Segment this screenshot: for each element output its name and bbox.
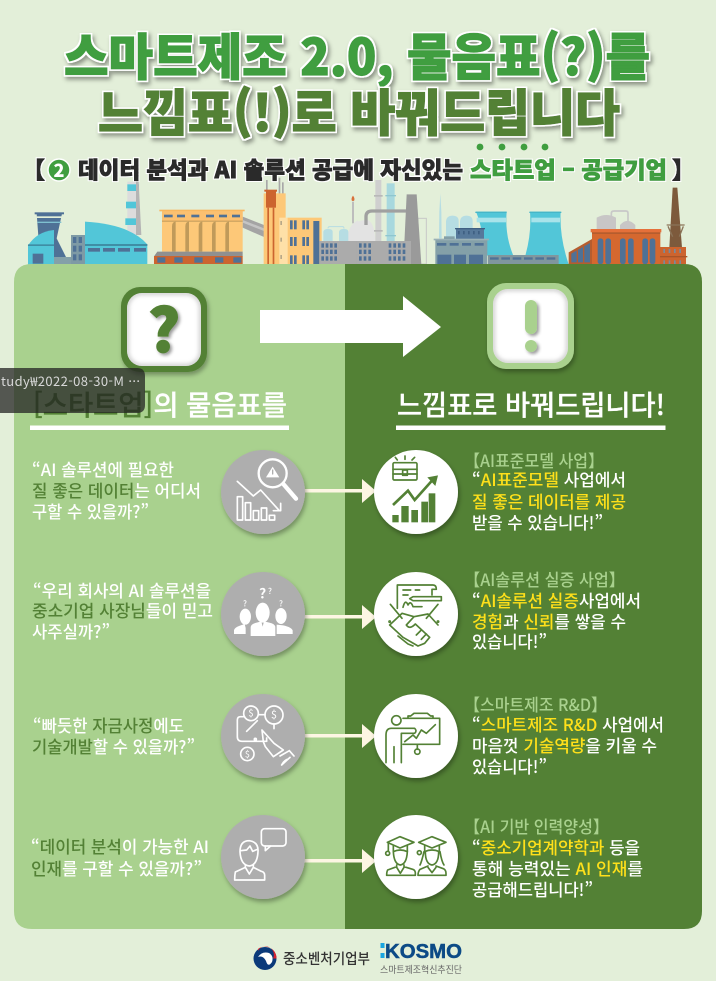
title: 느낌표(!)로 바꿔드립니다 <box>98 74 620 146</box>
text: answer 1: 【AI표준모델 사업】 <box>464 447 604 472</box>
icon: handshake and contract <box>374 572 458 656</box>
text: answer 1: “AI표준모델 사업에서 <box>472 466 626 491</box>
icon: presenter with chart <box>374 694 458 778</box>
heading: left: [스타트업]의 물음표를 <box>33 384 287 424</box>
icon: three confused people: ? <box>259 584 266 604</box>
logo: ministry <box>254 946 370 970</box>
icon: funding robot hand: $ <box>248 706 254 720</box>
subtitle: 2 <box>54 157 65 183</box>
text: answer 1: 받을 수 있습니다!” <box>472 509 603 534</box>
text: answer 4: 통해 능력있는 AI 인재를 <box>472 855 643 880</box>
text: question 1 <box>32 456 201 523</box>
row 2 connector arrow <box>300 605 376 629</box>
text: question 3: 기술개발할 수 있을까?” <box>32 733 195 758</box>
text: answer 2: 【AI솔루션 실증 사업】 <box>464 566 625 591</box>
file name tooltip overlay <box>0 368 145 413</box>
text: answer 3: “스마트제조 R&D 사업에서 <box>472 711 664 736</box>
text: answer 2: “AI솔루션 실증사업에서 <box>472 587 641 612</box>
text: question 1: 질 좋은 데이터는 어디서 <box>32 477 201 502</box>
logo: KOSMO: KOSMO <box>385 941 462 963</box>
text: answer 4 <box>464 813 643 901</box>
text: answer 3: 【스마트제조 R&D】 <box>464 691 607 716</box>
text: question 2 <box>32 577 213 643</box>
icon: standard model growth chart <box>374 450 458 534</box>
factory skyline, right half <box>357 180 687 264</box>
icon: three confused people: ? <box>243 599 247 610</box>
text: answer 2 <box>464 566 641 653</box>
subtitle <box>22 144 695 185</box>
text: answer 2: 있습니다!” <box>472 628 547 653</box>
logo: KOSMO <box>380 941 462 976</box>
file name tooltip overlay: tudy₩2022-08-30-M ··· <box>1 371 140 390</box>
text: question 2: “우리 회사의 AI 솔루션을 <box>33 577 211 602</box>
row 4 connector arrow <box>300 849 376 873</box>
panel: right (answer) <box>345 264 702 929</box>
subtitle: 데이터 분석과 AI 솔루션 공급에 자신있는 <box>78 151 463 185</box>
text: question 3 <box>32 712 195 758</box>
logo: KOSMO: 스마트제조혁신추진단 <box>380 962 462 976</box>
icon: funding robot hand: $ <box>245 747 250 760</box>
icon: three confused people <box>221 572 305 656</box>
text: question 4: “데이터 분석이 가능한 AI <box>31 833 209 858</box>
text: question 2: 사주실까?” <box>32 618 110 643</box>
icon: funding robot hand <box>221 694 305 778</box>
subtitle: 】 <box>672 151 695 185</box>
title: 스마트제조 2.0, 물음표(?)를 <box>64 18 650 90</box>
text: answer 3: 마음껏 기술역량을 키울 수 <box>472 732 657 757</box>
text: question 1: 구할 수 있을까?” <box>32 498 149 523</box>
subtitle: 스타트업 – 공급기업 <box>470 151 667 185</box>
subtitle: 【 <box>22 151 45 185</box>
logo: ministry: 중소벤처기업부 <box>283 948 370 969</box>
text: question 3: “빠듯한 자금사정에도 <box>33 712 184 737</box>
icon: graduates <box>374 815 458 899</box>
text: answer 4: 공급해드립니다!” <box>472 876 593 901</box>
text: answer 3 <box>464 691 664 778</box>
icon: question mark box <box>121 283 207 372</box>
text: answer 1: 질 좋은 데이터를 제공 <box>472 488 626 513</box>
panel: left (question) <box>14 264 345 929</box>
icon: three confused people: ? <box>279 599 283 610</box>
text: answer 1 <box>464 447 626 534</box>
factory skyline, left half <box>28 178 358 264</box>
text: question 2: 중소기업 사장님들이 믿고 <box>32 597 213 622</box>
icon: funding robot hand: $ <box>271 708 277 723</box>
icon: magnifier over falling chart <box>221 450 305 534</box>
icon: three confused people: ? <box>268 586 272 597</box>
text: question 1: “AI 솔루션에 필요한 <box>32 456 174 481</box>
heading: right: 느낌표로 바꿔드립니다! <box>397 384 665 424</box>
icon: question mark box: ? <box>148 283 180 370</box>
row 1 connector arrow <box>300 479 376 503</box>
row 3 connector arrow <box>300 724 376 748</box>
text: answer 2: 경험과 신뢰를 쌓을 수 <box>472 608 626 633</box>
text: answer 4: 【AI 기반 인력양성】 <box>464 813 609 838</box>
text: question 4: 인재를 구할 수 있을까?” <box>31 855 202 880</box>
icon: person with speech bubble <box>221 815 305 899</box>
text: question 4 <box>31 833 209 880</box>
arrow: question to exclamation <box>260 296 441 357</box>
text: answer 4: “중소기업계약학과 등을 <box>472 834 640 859</box>
icon: exclamation mark box <box>487 283 574 369</box>
text: answer 3: 있습니다!” <box>472 753 547 778</box>
title <box>64 18 650 146</box>
